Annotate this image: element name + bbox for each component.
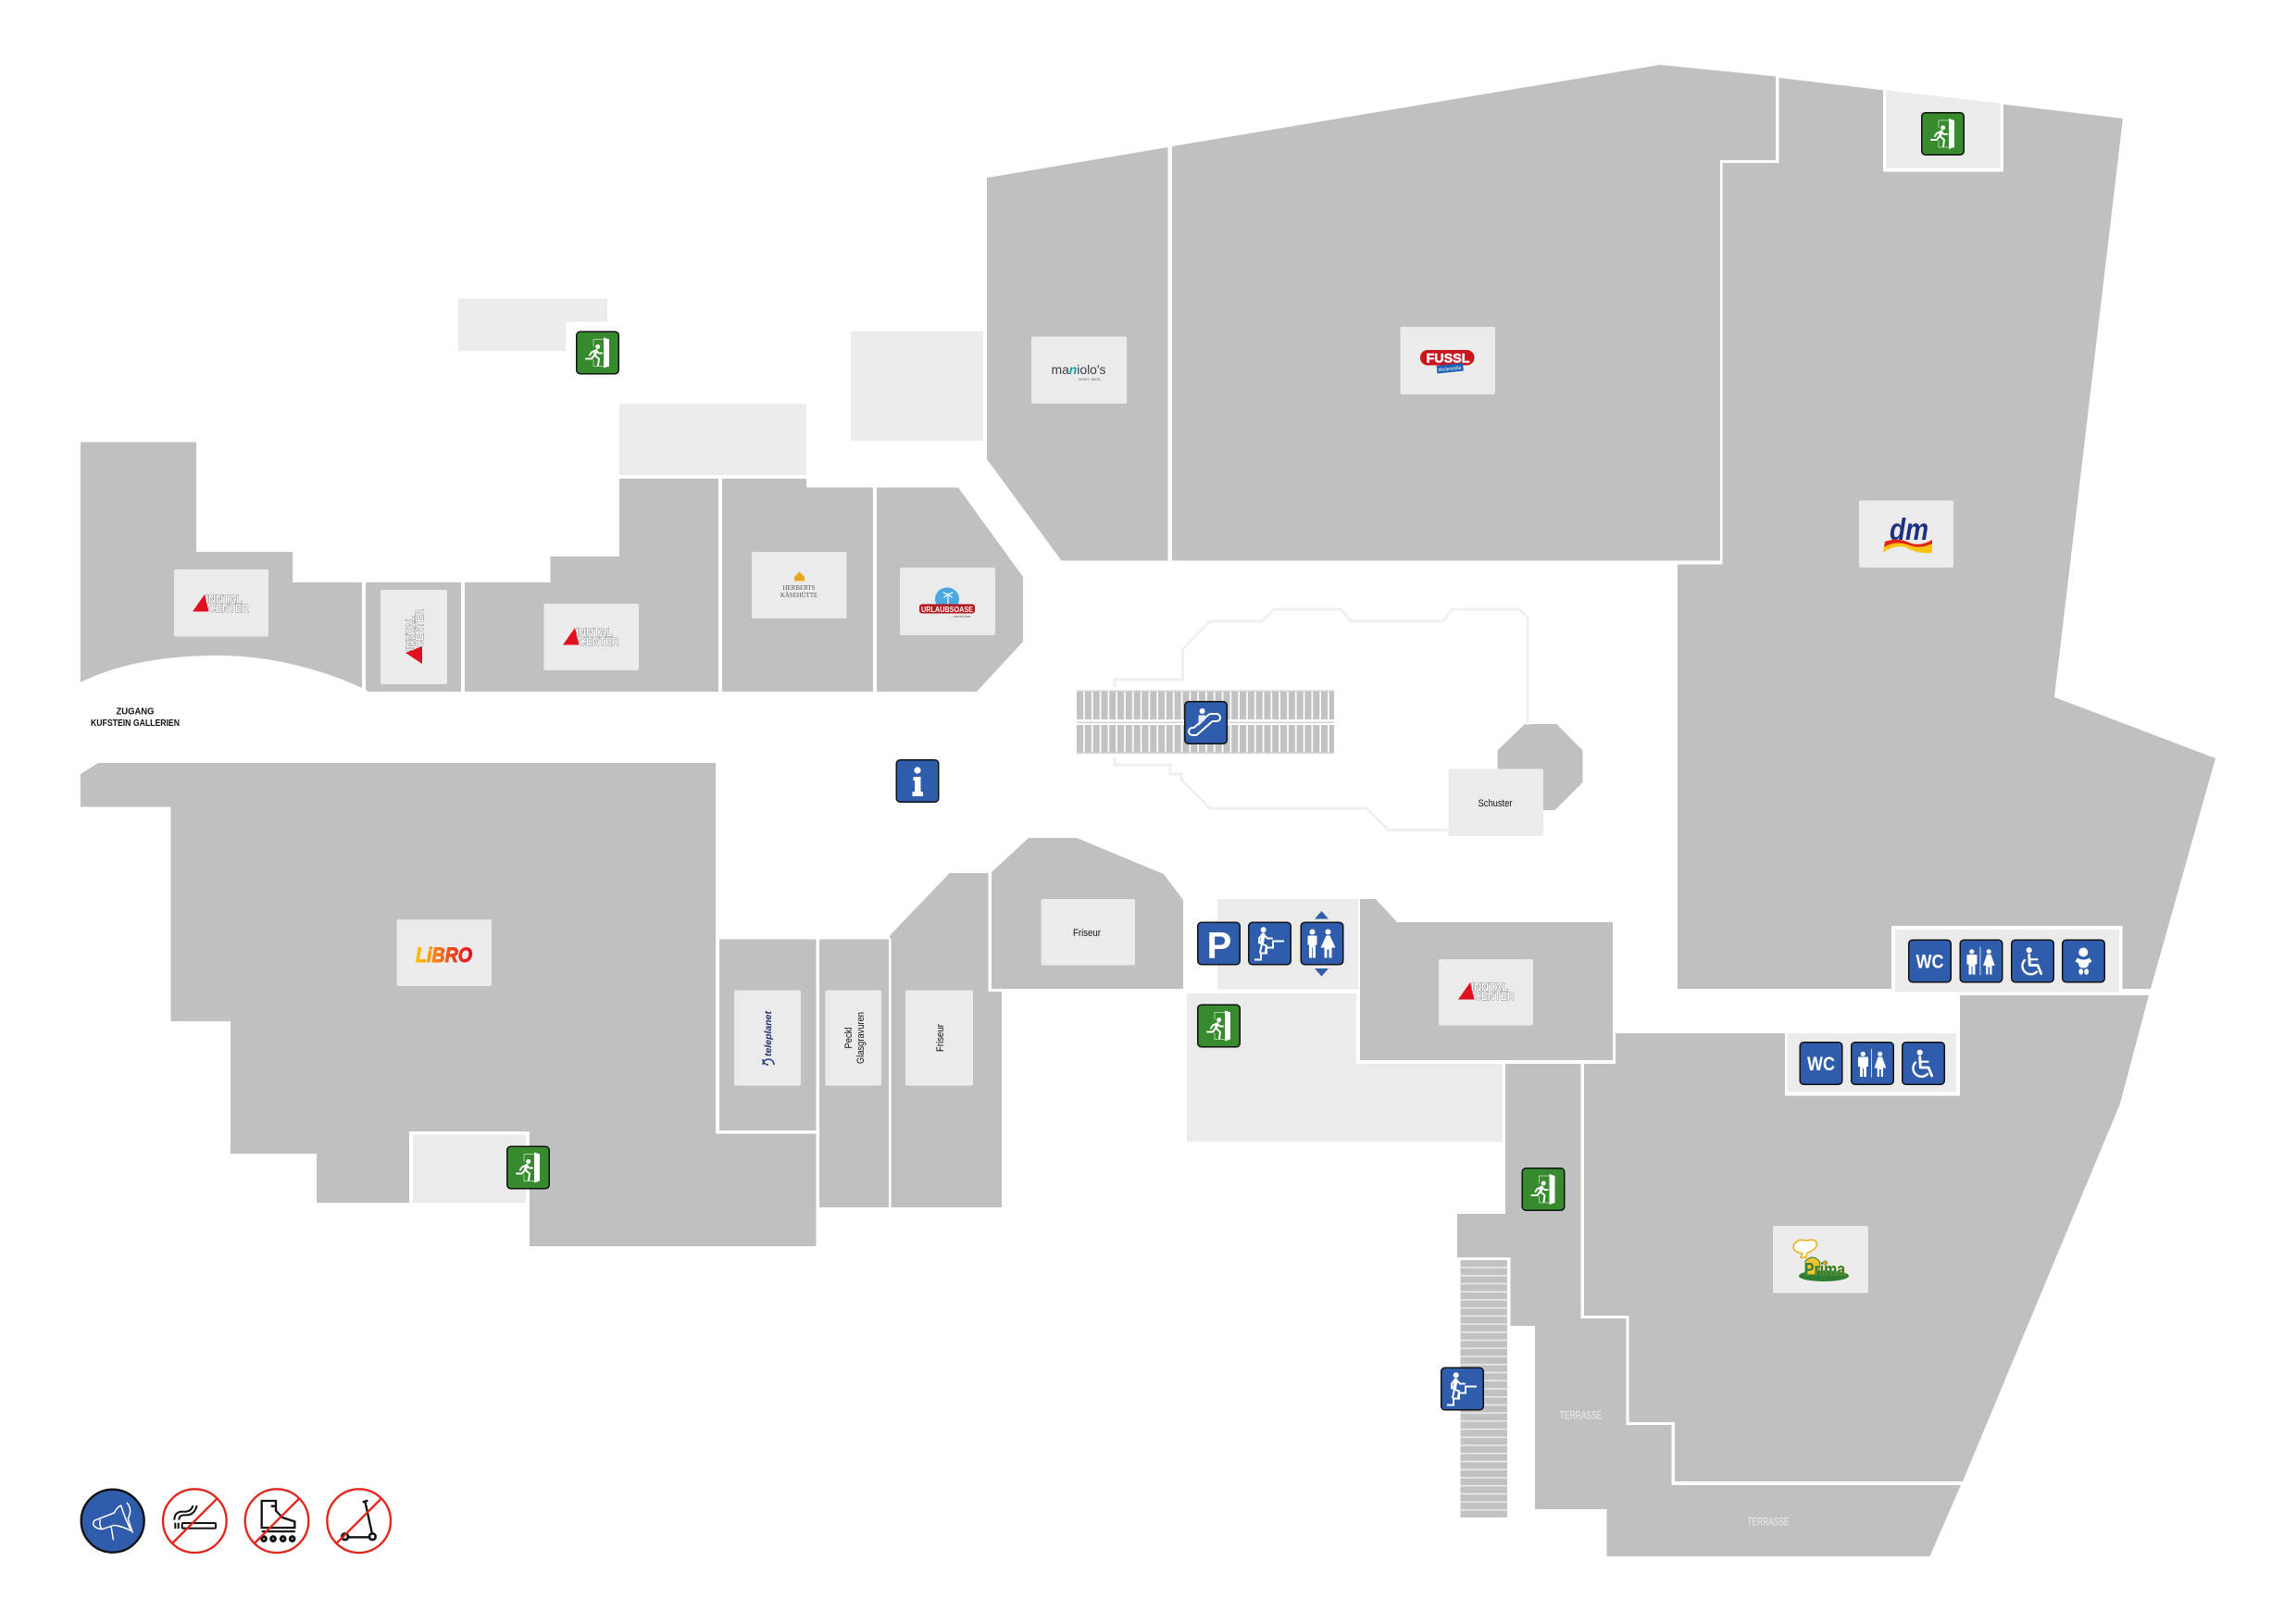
logo: Inntal Center: INNTAL [206, 593, 243, 606]
logo: Inntal Center [1458, 981, 1515, 1003]
icon: baby upper [2063, 940, 2104, 982]
service area: Libro exit [409, 1131, 530, 1203]
label: Zugang Kufstein Galerien: ZUGANG [117, 706, 154, 717]
icon: no inline skates [245, 1489, 308, 1553]
service area: upper left [458, 298, 607, 351]
logo box: Friseur south [905, 991, 973, 1085]
mall void outline [1115, 609, 1528, 830]
logo box: Friseur north [1041, 899, 1135, 965]
stairs [1461, 1260, 1507, 1518]
toilets box: upper [1891, 926, 2122, 995]
logo box: Fussl [1400, 327, 1495, 394]
logo text: Herberts Kasehutte [780, 584, 817, 599]
shop: Inntal west [81, 443, 362, 688]
logo: Teleplanet: teleplanet [763, 1010, 774, 1056]
toilets box: lower [1785, 1033, 1960, 1096]
shop: Herberts Kasehutte [722, 479, 873, 692]
icon: megaphone rule [81, 1490, 144, 1553]
logo: Maniolo's: SHOES. BAGS. [1079, 378, 1101, 381]
logo box: Teleplanet [734, 991, 801, 1085]
icon: cheese hut [794, 572, 805, 581]
logo text: Herberts Kasehutte: KÄSEHÜTTE [780, 592, 817, 599]
icon: escalator [1185, 702, 1227, 743]
logo: Fussl: Modestraße [1438, 366, 1462, 373]
icon: couple upper [1960, 940, 2003, 982]
label: Zugang Kufstein Galerien [91, 706, 180, 729]
icon: exit Libro [507, 1146, 549, 1189]
logo: Urlaubsoase: ... und ab raus [950, 615, 970, 618]
logo: Fussl: FUSSL [1426, 350, 1470, 365]
shop: Maniolo's [987, 147, 1168, 561]
terrace area [1457, 1064, 1961, 1556]
escalator [1077, 691, 1334, 754]
logo box: Schuster [1448, 768, 1543, 836]
label: Peckl Glasgravuren: Peckl [843, 1028, 855, 1048]
shop: Libro [81, 763, 817, 1246]
logo: Maniolo's: maniolo's [1052, 362, 1105, 377]
shop: Schuster kiosk [1498, 724, 1583, 810]
label: Friseur: Friseur [1073, 928, 1101, 939]
shop: Inntal east [1360, 899, 1613, 1060]
label: Friseur: Friseur [935, 1024, 946, 1052]
logo: Inntal Center: CENTER [209, 602, 249, 615]
logo box: Inntal middle [544, 604, 639, 670]
shop: Inntal narrow [366, 582, 461, 692]
service area: parking access [1217, 899, 1358, 989]
icon: exit terrace [1522, 1168, 1565, 1210]
icon: wheelchair lower [1903, 1043, 1944, 1084]
shop: Inntal middle [465, 479, 718, 692]
icon: WC upper [1909, 940, 1951, 982]
logo: Urlaubsoase: URLAUBSOASE [921, 605, 973, 614]
logo box: Prima [1773, 1226, 1868, 1293]
shop: Urlaubsoase [877, 487, 1023, 692]
logo box: Maniolo's [1031, 337, 1127, 404]
service area: south corridor [1187, 993, 1503, 1142]
label: Zugang Kufstein Galerien: KUFSTEIN GALLERIEN [91, 718, 180, 729]
icon: information [896, 760, 939, 802]
label: Terrasse south: TERRASSE [1748, 1517, 1790, 1528]
icon: exit parking [1198, 1005, 1240, 1047]
logo box: Urlaubsoase [900, 568, 995, 635]
icon: couple lower [1852, 1043, 1893, 1084]
icon: no scooters [327, 1489, 391, 1553]
logo: Inntal Center rotated [404, 609, 426, 651]
logo box: Peckl [826, 991, 881, 1085]
logo text: Herberts Kasehutte: HERBERTS [783, 584, 816, 592]
logo: Inntal Center rotated: INNTAL [404, 616, 417, 651]
icon: wheelchair upper [2012, 940, 2053, 982]
icon: WC lower [1800, 1043, 1842, 1084]
logo: Inntal Center rotated: CENTER [413, 609, 426, 647]
icon: parking: P [1207, 926, 1231, 967]
shop: Teleplanet [719, 939, 817, 1131]
label: Terrasse west: TERRASSE [1559, 1411, 1603, 1422]
logo: Inntal Center: CENTER [580, 635, 619, 648]
logo: Urlaubsoase [919, 587, 975, 618]
logo: Prima: Prima [1804, 1260, 1846, 1279]
icon: exit north west [577, 331, 618, 374]
icon: parking [1198, 922, 1240, 967]
logo box: dm [1859, 500, 1953, 568]
service area: north east [851, 331, 983, 441]
service area: dm exit [1883, 90, 2003, 172]
icon: no smoking [163, 1489, 227, 1553]
logo: Inntal Center [563, 626, 619, 648]
logo: Inntal Center: INNTAL [576, 626, 613, 639]
logo: Fussl [1420, 350, 1474, 373]
logo: Inntal Center: CENTER [1474, 990, 1515, 1003]
label: Peckl Glasgravuren [843, 1012, 867, 1064]
shop: Prima [1584, 995, 2149, 1481]
logo box: Inntal narrow [381, 590, 447, 684]
shop: Friseur south [889, 873, 1002, 1207]
shop: Peckl Glasgravuren [819, 939, 889, 1207]
icon: toilets with lift arrows [1301, 911, 1343, 976]
label: Schuster: Schuster [1478, 798, 1513, 809]
logo box: Inntal east [1439, 959, 1533, 1026]
logo box: Herberts Kasehutte [752, 552, 846, 618]
service area: north [619, 404, 806, 475]
logo: Libro: LiBRO [416, 943, 472, 967]
icon: stairs terrace [1441, 1368, 1483, 1410]
logo: Inntal Center [193, 593, 249, 615]
icon: exit dm [1922, 113, 1964, 155]
shop: Fussl [1172, 65, 1776, 561]
icon: stairs parking [1249, 922, 1291, 965]
logo box: Inntal west [174, 569, 268, 637]
logo box: Libro [396, 919, 492, 986]
label: Peckl Glasgravuren: Glasgravuren [855, 1012, 867, 1064]
shop: Friseur north [992, 838, 1183, 989]
shop: dm [1678, 78, 2215, 989]
logo: Inntal Center: INNTAL [1471, 981, 1508, 993]
logo: dm: dm [1890, 512, 1928, 546]
